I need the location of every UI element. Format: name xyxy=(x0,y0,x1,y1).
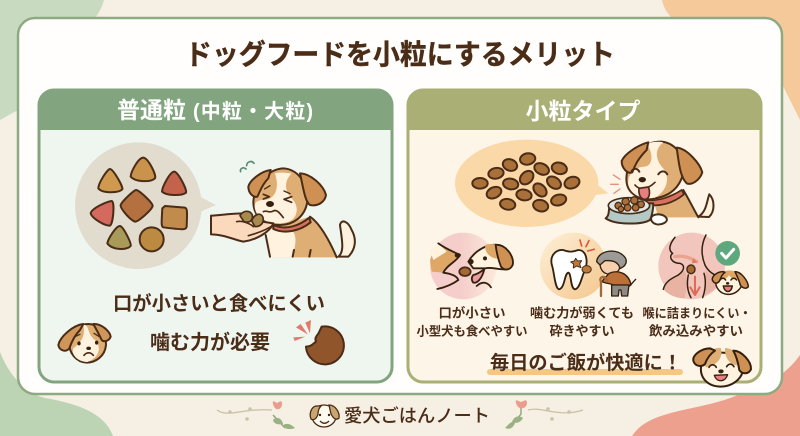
caption: easy to swallow: 喉に詰まりにくい・ xyxy=(642,306,752,320)
title: ドッグフードを小粒にするメリット xyxy=(185,38,615,70)
footer brand xyxy=(217,400,583,429)
icon: worried dog face xyxy=(58,324,111,363)
caption: small mouth xyxy=(416,306,528,338)
panel header: regular kibble: 普通粒 xyxy=(117,97,186,123)
caption: small mouth: 口が小さい xyxy=(438,306,506,320)
speech bubble with small kibble xyxy=(455,140,608,227)
benefit: weak chewing strength xyxy=(530,233,636,338)
caption: easy to swallow xyxy=(642,306,752,338)
icon: happy dog with bowl xyxy=(606,142,714,224)
icon: left floral sprig xyxy=(217,401,295,429)
caption: weak chewing strength: 噛む力が弱くても xyxy=(530,306,634,320)
caption: weak chewing strength xyxy=(530,306,634,338)
brand name: 愛犬ごはんノート xyxy=(344,406,490,426)
panel header: small kibble xyxy=(407,89,762,130)
icon: throat with check mark and dog xyxy=(658,233,748,299)
text: hard to eat with small mouth: 口が小さいと食べにくい xyxy=(113,292,325,315)
icon: brand dog face xyxy=(310,405,339,427)
icon: tooth and senior person xyxy=(540,233,636,299)
panel header: small kibble: 小粒タイプ xyxy=(526,98,640,124)
caption: small mouth: 小型犬も食べやすい xyxy=(416,324,528,338)
panel: regular kibble xyxy=(38,89,393,382)
benefit: easy to swallow xyxy=(642,233,752,338)
speech bubble with large kibble xyxy=(75,142,216,269)
icon: small dog mouth xyxy=(430,233,513,299)
icon: right floral sprig xyxy=(505,400,583,429)
panel: small kibble xyxy=(407,89,762,387)
icon: smiling dog face xyxy=(693,348,751,387)
panel header: regular kibble xyxy=(38,89,393,130)
caption: easy to swallow: 飲み込みやすい xyxy=(649,324,743,338)
benefit: small mouth xyxy=(416,233,528,338)
icon: dog struggling with kibble fed by hand xyxy=(211,162,355,257)
caption: weak chewing strength: 砕きやすい xyxy=(550,324,614,338)
panel header: regular kibble: (中粒・大粒) xyxy=(193,100,313,123)
icon: bitten kibble with impact marks xyxy=(293,320,344,364)
text: chewing strength required: 噛む力が必要 xyxy=(150,330,270,354)
highlighted conclusion text: 毎日のご飯が快適に！ xyxy=(490,351,682,374)
